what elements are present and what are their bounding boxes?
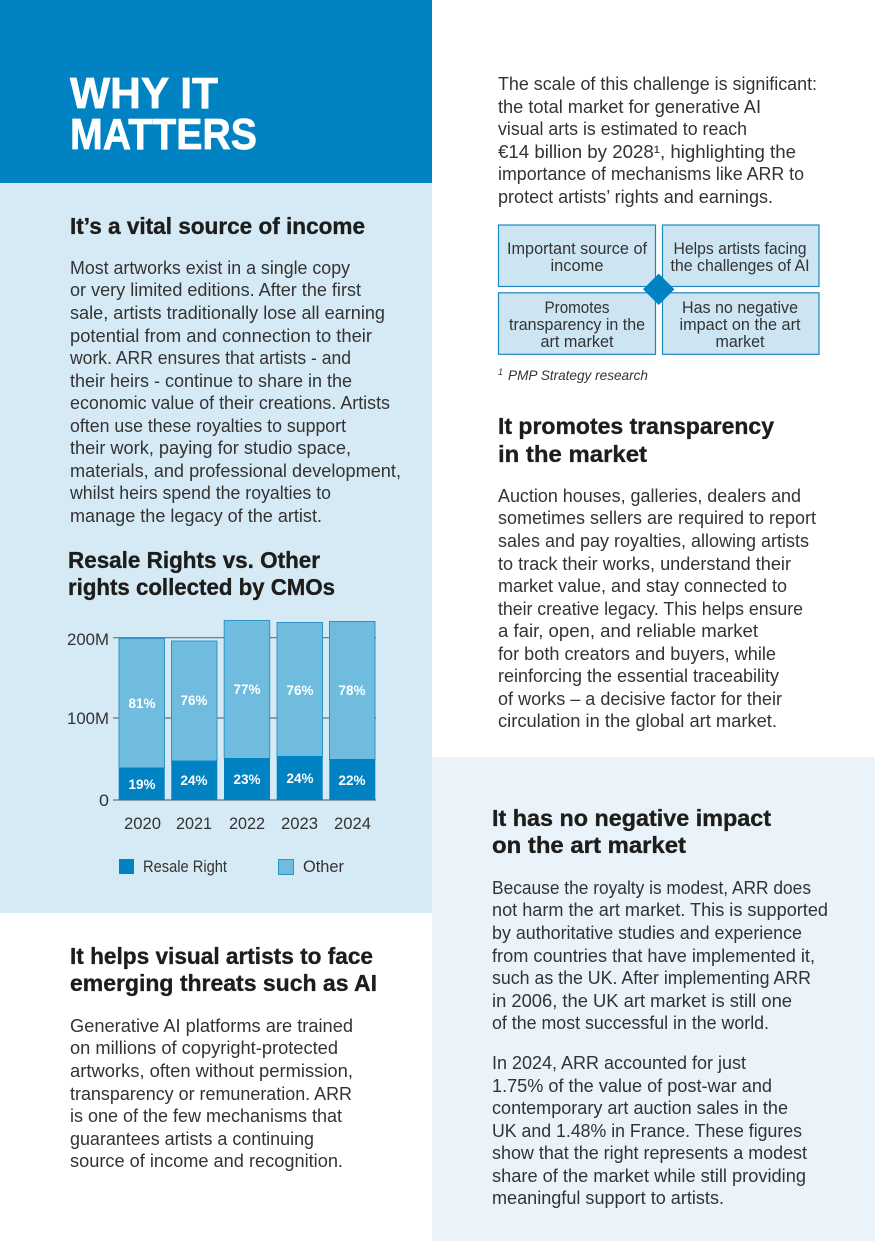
panel: vital source of income xyxy=(0,183,432,913)
text block: income explanation: their heirs - continue to share in the xyxy=(70,371,352,391)
text block: generative AI: Generative AI platforms are trained xyxy=(70,1016,353,1036)
bar 2024 xyxy=(329,622,375,800)
text block: modest royalty: Because the royalty is modest, ARR does xyxy=(492,878,811,898)
text block: modest royalty: not harm the art market. This is supported xyxy=(492,900,828,920)
text block: modest royalty: such as the UK. After implementing ARR xyxy=(492,968,811,988)
panel: title banner xyxy=(0,0,432,183)
text block: transparency: sometimes sellers are required to report xyxy=(498,508,816,528)
bar 2020 xyxy=(119,638,165,800)
heading: threats such as AI: It helps visual artists to face xyxy=(70,943,373,969)
benefit: transparency xyxy=(509,299,645,351)
title: MATTERS xyxy=(70,110,257,159)
text block: scale of challenge: protect artists’ rights and earnings. xyxy=(498,187,773,207)
text block: transparency: reinforcing the essential traceability xyxy=(498,666,779,686)
bar 2021: 76% xyxy=(180,693,208,708)
heading: vital source of income: It’s a vital source of income xyxy=(70,213,365,239)
text block: 2024 figures: meaningful support to artists. xyxy=(492,1188,724,1208)
y axis labels: 200M xyxy=(67,631,109,649)
benefit: income: Important source of xyxy=(507,240,647,258)
heading: transparency xyxy=(498,413,774,467)
text block: income explanation: manage the legacy of the artist. xyxy=(70,506,322,526)
benefit: transparency: transparency in the xyxy=(509,316,645,334)
text block: transparency: to track their works, understand their xyxy=(498,554,791,574)
x axis labels: 2021 xyxy=(176,815,212,833)
text block: income explanation: potential from and connection to their xyxy=(70,326,372,346)
bar 2022: 23% xyxy=(233,772,261,787)
text block: transparency: a fair, open, and reliable market xyxy=(498,621,758,641)
text block: 2024 figures: show that the right represents a modest xyxy=(492,1143,807,1163)
benefit: no negative impact: impact on the art xyxy=(680,316,801,334)
bar 2020: 81% xyxy=(128,696,156,711)
text block: 2024 figures: 1.75% of the value of post-war and xyxy=(492,1076,772,1096)
text block: income explanation: Most artworks exist in a single copy xyxy=(70,258,350,278)
bar 2024: 78% xyxy=(338,683,366,698)
bar 2022 xyxy=(224,620,270,800)
benefit: income: income xyxy=(550,257,604,275)
x axis labels: 2024 xyxy=(334,815,371,833)
text block: modest royalty: of the most successful in the world. xyxy=(492,1013,769,1033)
text block: transparency: market value, and stay connected to xyxy=(498,576,787,596)
panel: no negative impact xyxy=(432,757,875,1241)
benefit: transparency: art market xyxy=(540,333,614,351)
text block: generative AI: on millions of copyright-protected xyxy=(70,1038,338,1058)
heading: threats such as AI: emerging threats such as AI xyxy=(70,970,377,996)
bar 2021 xyxy=(171,641,217,800)
heading: transparency: It promotes transparency xyxy=(498,413,774,439)
y axis labels: 100M xyxy=(67,710,109,728)
text block: income explanation: or very limited editions. After the first xyxy=(70,280,361,300)
benefit: AI: Helps artists facing xyxy=(674,240,806,258)
text block: scale of challenge: the total market for generative AI xyxy=(498,97,761,117)
x axis labels xyxy=(124,815,371,833)
text block: transparency: their creative legacy. This helps ensure xyxy=(498,599,803,619)
title: WHY IT xyxy=(70,69,218,118)
y axis labels: 0 xyxy=(99,792,109,810)
footnote: 1 xyxy=(498,367,503,377)
benefit: AI xyxy=(670,240,810,275)
diagram: four benefits xyxy=(498,225,819,354)
text block: 2024 figures xyxy=(492,1053,807,1208)
heading: chart title: Resale Rights vs. Other xyxy=(68,547,320,573)
benefit: AI: the challenges of AI xyxy=(670,257,810,275)
heading: no negative impact xyxy=(492,805,771,858)
text block: scale of challenge xyxy=(498,74,817,207)
text block: 2024 figures: share of the market while still providing xyxy=(492,1166,806,1186)
text block: scale of challenge: visual arts is estimated to reach xyxy=(498,119,747,139)
title xyxy=(70,69,257,159)
text block: income explanation: often use these royalties to support xyxy=(70,416,346,436)
text block: scale of challenge: €14 billion by 2028¹, highlighting the xyxy=(498,142,796,162)
text block: transparency: circulation in the global art market. xyxy=(498,711,777,731)
heading: chart title: rights collected by CMOs xyxy=(68,574,335,600)
legend: Other xyxy=(303,858,344,876)
text block: 2024 figures: UK and 1.48% in France. These figures xyxy=(492,1121,802,1141)
heading: chart title xyxy=(68,547,335,600)
text block: income explanation: economic value of their creations. Artists xyxy=(70,393,390,413)
text block: income explanation: work. ARR ensures that artists - and xyxy=(69,348,351,368)
text block: modest royalty: by authoritative studies and experience xyxy=(492,923,802,943)
benefit: transparency: Promotes xyxy=(544,299,610,317)
text block: generative AI: guarantees artists a continuing xyxy=(70,1129,314,1149)
text block: transparency: sales and pay royalties, allowing artists xyxy=(498,531,809,551)
text block: 2024 figures: contemporary art auction sales in the xyxy=(492,1098,788,1118)
x axis labels: 2023 xyxy=(281,815,318,833)
text block: income explanation xyxy=(69,258,401,526)
bar 2023 xyxy=(277,622,323,800)
text block: generative AI xyxy=(70,1016,353,1171)
legend: Resale Right xyxy=(143,858,227,876)
text block: transparency: for both creators and buyers, while xyxy=(498,644,776,664)
text block: scale of challenge: The scale of this challenge is significant: xyxy=(498,74,817,94)
text block: 2024 figures: In 2024, ARR accounted for just xyxy=(492,1053,746,1073)
text block: modest royalty xyxy=(492,878,828,1033)
text block: generative AI: is one of the few mechanisms that xyxy=(70,1106,342,1126)
text block: generative AI: source of income and recognition. xyxy=(70,1151,343,1171)
heading: no negative impact: on the art market xyxy=(492,832,686,858)
bar 2020: 19% xyxy=(128,777,156,792)
bar 2023: 76% xyxy=(286,683,314,698)
heading: transparency: in the market xyxy=(498,441,647,467)
text block: income explanation: their work, paying for studio space, xyxy=(70,438,351,458)
text block: generative AI: artworks, often without permission, xyxy=(70,1061,353,1081)
legend xyxy=(119,858,344,876)
bar chart: resale right vs other xyxy=(67,620,376,876)
bar 2021: 24% xyxy=(180,773,208,788)
x axis labels: 2022 xyxy=(229,815,265,833)
text block: transparency: of works – a decisive factor for their xyxy=(498,689,782,709)
bar 2024: 22% xyxy=(338,773,366,788)
bar 2023: 24% xyxy=(286,771,314,786)
x axis labels: 2020 xyxy=(124,815,161,833)
bar 2022: 77% xyxy=(233,682,261,697)
text block: scale of challenge: importance of mechanisms like ARR to xyxy=(498,164,804,184)
text block: transparency: Auction houses, galleries, dealers and xyxy=(498,486,801,506)
benefit: income xyxy=(507,240,647,275)
text block: modest royalty: from countries that have implemented it, xyxy=(492,946,815,966)
icon: centre diamond xyxy=(643,274,674,305)
text block: modest royalty: in 2006, the UK art market is still one xyxy=(492,991,792,1011)
text block: generative AI: transparency or remuneration. ARR xyxy=(70,1084,352,1104)
text block: income explanation: materials, and professional development, xyxy=(70,461,401,481)
benefit: no negative impact: market xyxy=(716,333,765,351)
heading: no negative impact: It has no negative impact xyxy=(492,805,771,831)
heading: threats such as AI xyxy=(70,943,377,996)
footnote: PMP Strategy research xyxy=(508,367,648,383)
benefit: no negative impact xyxy=(680,299,801,351)
text block: income explanation: whilst heirs spend the royalties to xyxy=(69,483,331,503)
y axis labels xyxy=(67,631,109,810)
text block: income explanation: sale, artists traditionally lose all earning xyxy=(70,303,385,323)
benefit: no negative impact: Has no negative xyxy=(682,299,798,317)
text block: transparency xyxy=(498,486,816,731)
